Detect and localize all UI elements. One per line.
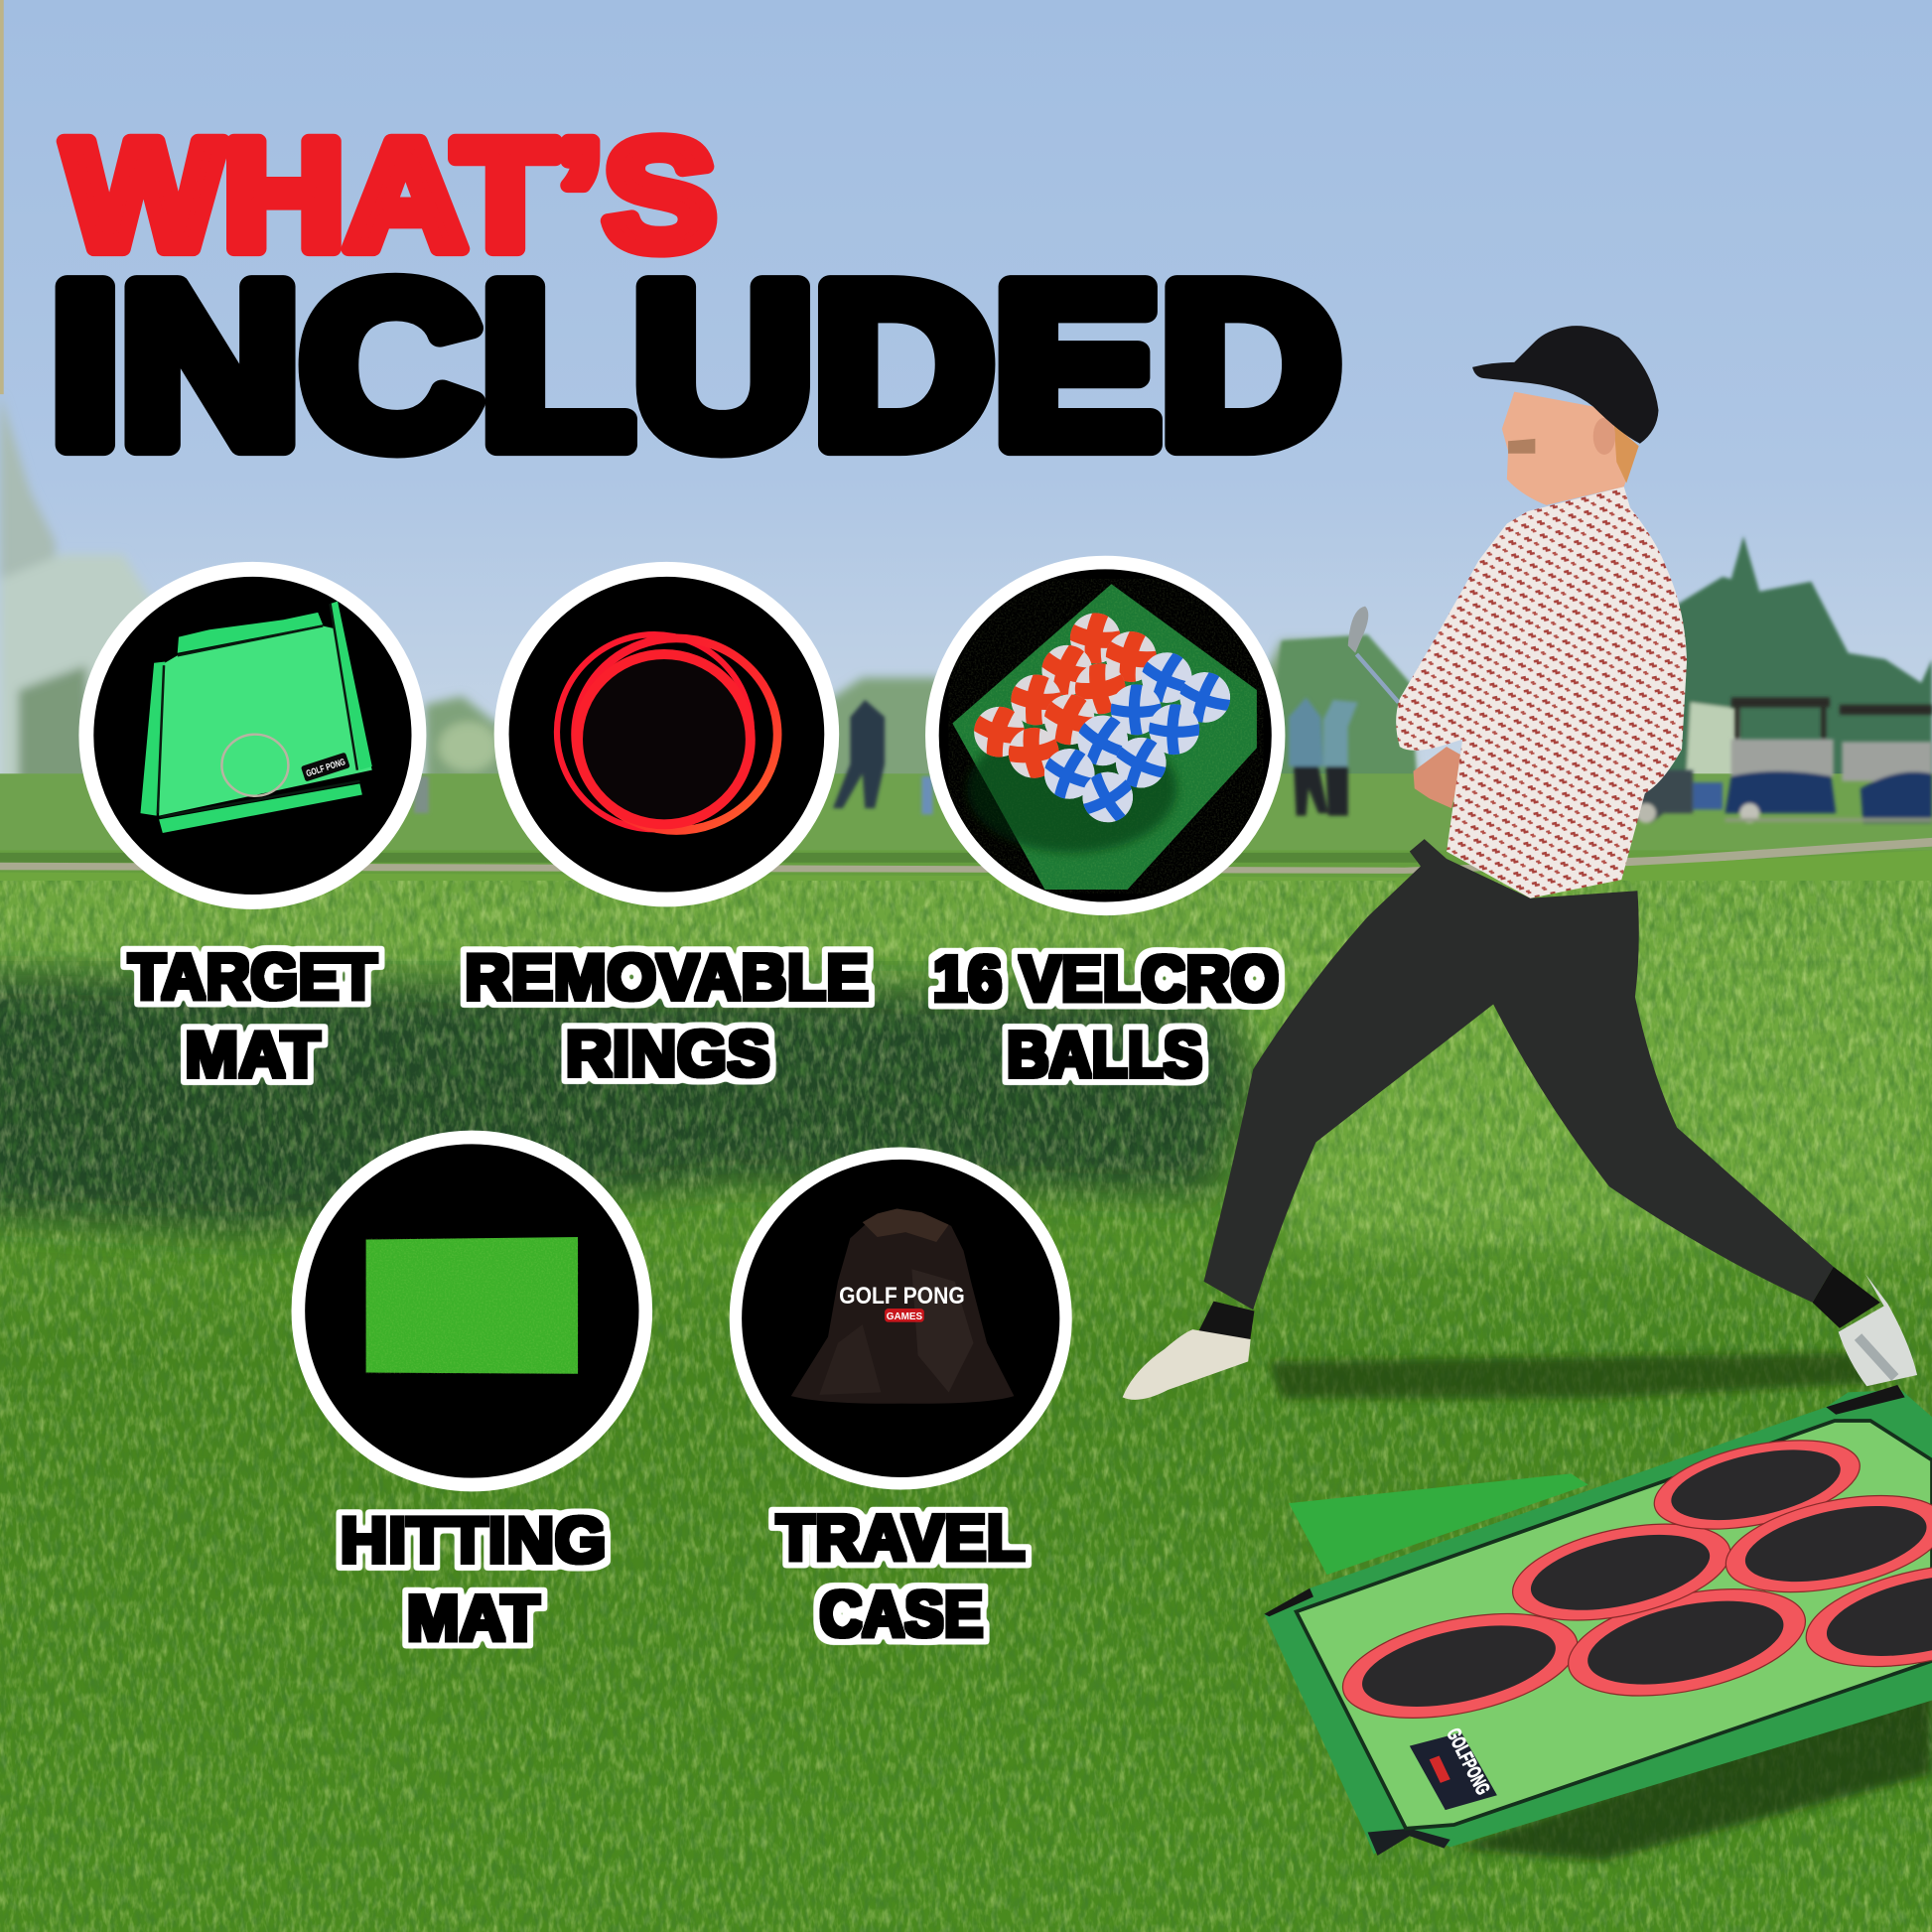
left edge strip bbox=[0, 0, 4, 394]
circle bbox=[736, 1154, 1066, 1483]
circle bbox=[86, 569, 419, 901]
circle bbox=[298, 1138, 645, 1484]
title line 1: WHAT’S bbox=[65, 108, 716, 283]
board logo: GOLFPONG bbox=[1442, 1725, 1494, 1799]
label: target mat bbox=[128, 941, 377, 1091]
board logo bbox=[1410, 1725, 1497, 1810]
bag logo: GOLF PONG bbox=[839, 1283, 965, 1309]
trousers bbox=[1204, 839, 1834, 1310]
mat logo: GOLF PONG bbox=[305, 757, 346, 778]
label: velcro balls bbox=[932, 943, 1279, 1091]
item: travel case bbox=[736, 1154, 1066, 1483]
ring outline bbox=[221, 735, 288, 796]
hands bbox=[1414, 747, 1463, 808]
label: hitting mat bbox=[341, 1505, 607, 1654]
label: velcro balls: BALLS bbox=[1007, 1020, 1202, 1091]
board frame bbox=[1264, 1390, 1932, 1855]
mat logo bbox=[301, 753, 350, 781]
mat image bbox=[140, 602, 372, 833]
item: target mat bbox=[86, 569, 419, 901]
label: hitting mat: MAT bbox=[407, 1583, 540, 1654]
background: golf carts bbox=[1634, 697, 1932, 823]
label: hitting mat: HITTING bbox=[341, 1505, 607, 1577]
background: grass field bbox=[0, 773, 1932, 1932]
ring C with velcro disk bbox=[578, 654, 751, 824]
circle bbox=[932, 563, 1279, 908]
golf club bbox=[1348, 607, 1399, 702]
item: hitting mat bbox=[298, 1138, 645, 1484]
label: target mat: TARGET bbox=[128, 941, 377, 1013]
label: removable rings: RINGS bbox=[566, 1018, 770, 1089]
board surface bbox=[1297, 1421, 1932, 1829]
bag games badge: GAMES bbox=[887, 1311, 923, 1322]
shirt bbox=[1396, 486, 1687, 898]
ring B bbox=[576, 638, 777, 830]
label: velcro balls: 16 VELCRO bbox=[932, 943, 1279, 1015]
golfer bbox=[1123, 326, 1917, 1400]
background: distant trees bbox=[0, 394, 1932, 788]
background: people bbox=[414, 697, 1358, 816]
item: velcro balls bbox=[932, 563, 1279, 908]
board rings bbox=[1333, 1425, 1932, 1736]
label: removable rings bbox=[465, 942, 869, 1089]
title line 2: INCLUDED bbox=[51, 237, 1340, 494]
ring A bbox=[557, 634, 752, 829]
blue balls bbox=[1034, 641, 1240, 834]
label: travel case: CASE bbox=[819, 1579, 983, 1650]
background: sky bbox=[0, 0, 1932, 788]
item: removable rings bbox=[501, 569, 832, 899]
label: travel case: TRAVEL bbox=[776, 1502, 1026, 1574]
cap bbox=[1472, 326, 1658, 444]
hitting mat on ground bbox=[1289, 1473, 1588, 1575]
turf bbox=[949, 579, 1263, 894]
head bbox=[1502, 392, 1639, 505]
front sock and shoe bbox=[1123, 1302, 1254, 1400]
bag bbox=[791, 1208, 1014, 1404]
back sock and shoe bbox=[1813, 1267, 1917, 1386]
label: travel case bbox=[776, 1502, 1026, 1650]
board corner brackets bbox=[1264, 1385, 1905, 1856]
green mat bbox=[366, 1237, 578, 1374]
label: target mat: MAT bbox=[185, 1020, 321, 1091]
label: removable rings: REMOVABLE bbox=[465, 942, 869, 1014]
circle bbox=[501, 569, 832, 899]
title bbox=[51, 108, 1340, 494]
target mat on grass bbox=[1264, 1385, 1932, 1856]
red balls bbox=[966, 608, 1164, 783]
